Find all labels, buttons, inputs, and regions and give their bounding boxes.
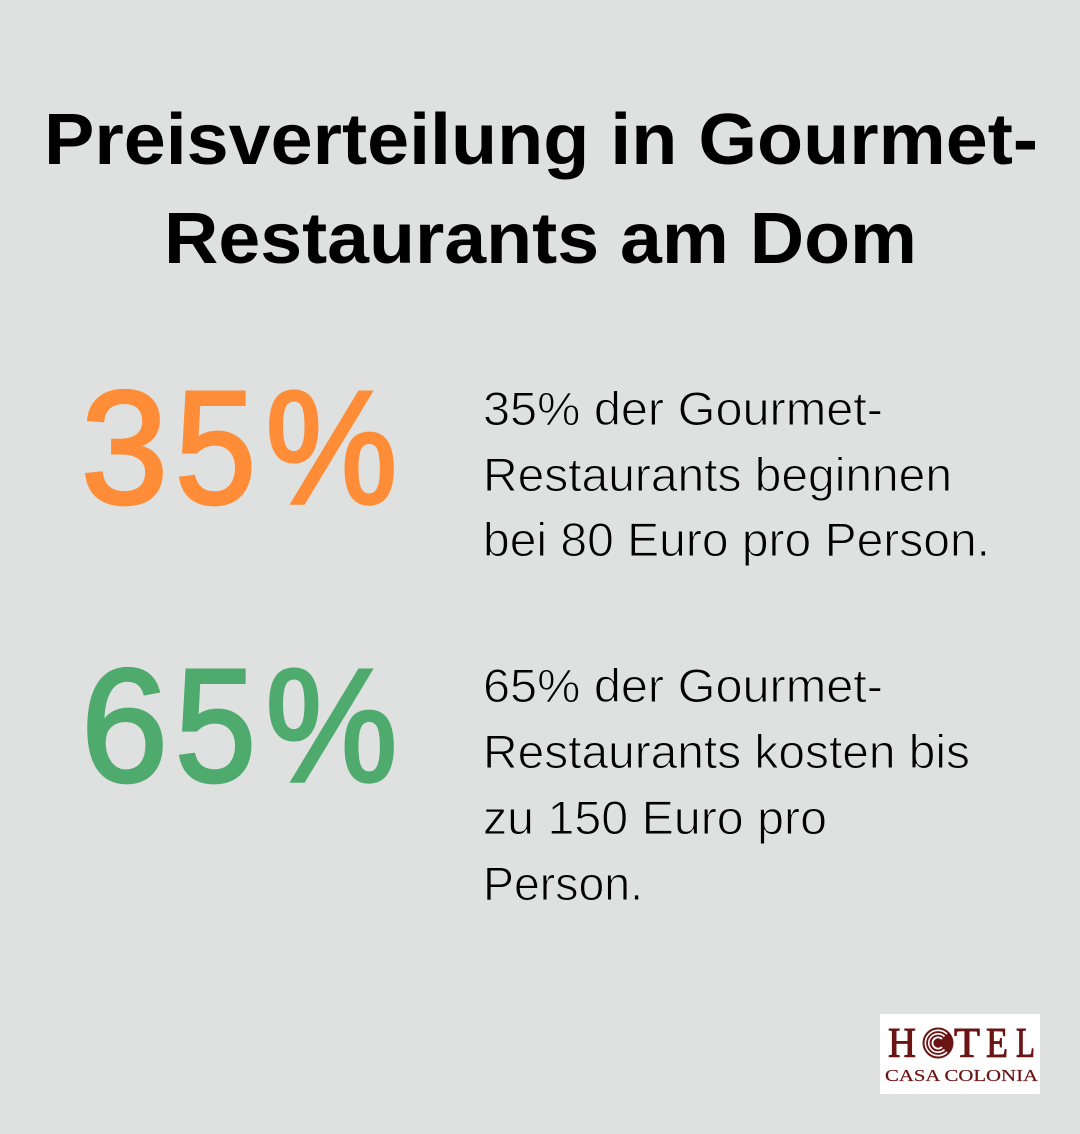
stat: 65%: % <box>266 636 398 816</box>
stat: 35%: 5 <box>175 358 256 538</box>
text: 35% description: Restaurants beginnen <box>483 448 952 501</box>
icon: logo spiral O <box>922 1028 954 1058</box>
title: Preisverteilung in Gourmet- <box>44 100 1038 180</box>
text: 35% description <box>483 382 990 566</box>
stat: 65%: 5 <box>175 636 256 816</box>
text: 35% description: bei 80 Euro pro Person. <box>483 513 990 566</box>
stat: 35%: 3 <box>81 358 168 538</box>
text: 65% description: Restaurants kosten bis <box>483 725 970 778</box>
title <box>44 100 1038 279</box>
logo: Hotel Casa Colonia: T <box>954 1021 980 1067</box>
stat: 35%: % <box>266 358 398 538</box>
stat: 65%: 6 <box>81 636 168 816</box>
logo: Hotel Casa Colonia: H <box>888 1021 916 1067</box>
title: Restaurants am Dom <box>164 199 917 279</box>
logo: Hotel Casa Colonia: CASA COLONIA <box>885 1066 1039 1085</box>
text: 65% description <box>483 659 970 910</box>
text: 65% description: zu 150 Euro pro <box>483 791 827 844</box>
stat: 65% <box>81 636 398 816</box>
stat: 35% <box>81 358 398 538</box>
text: 65% description: 65% der Gourmet- <box>483 659 883 712</box>
logo: Hotel Casa Colonia: L <box>1016 1021 1035 1067</box>
text: 65% description: Person. <box>483 857 643 910</box>
text: 35% description: 35% der Gourmet- <box>483 382 883 435</box>
logo: Hotel Casa Colonia: E <box>986 1021 1008 1067</box>
logo: Hotel Casa Colonia <box>880 1014 1040 1094</box>
